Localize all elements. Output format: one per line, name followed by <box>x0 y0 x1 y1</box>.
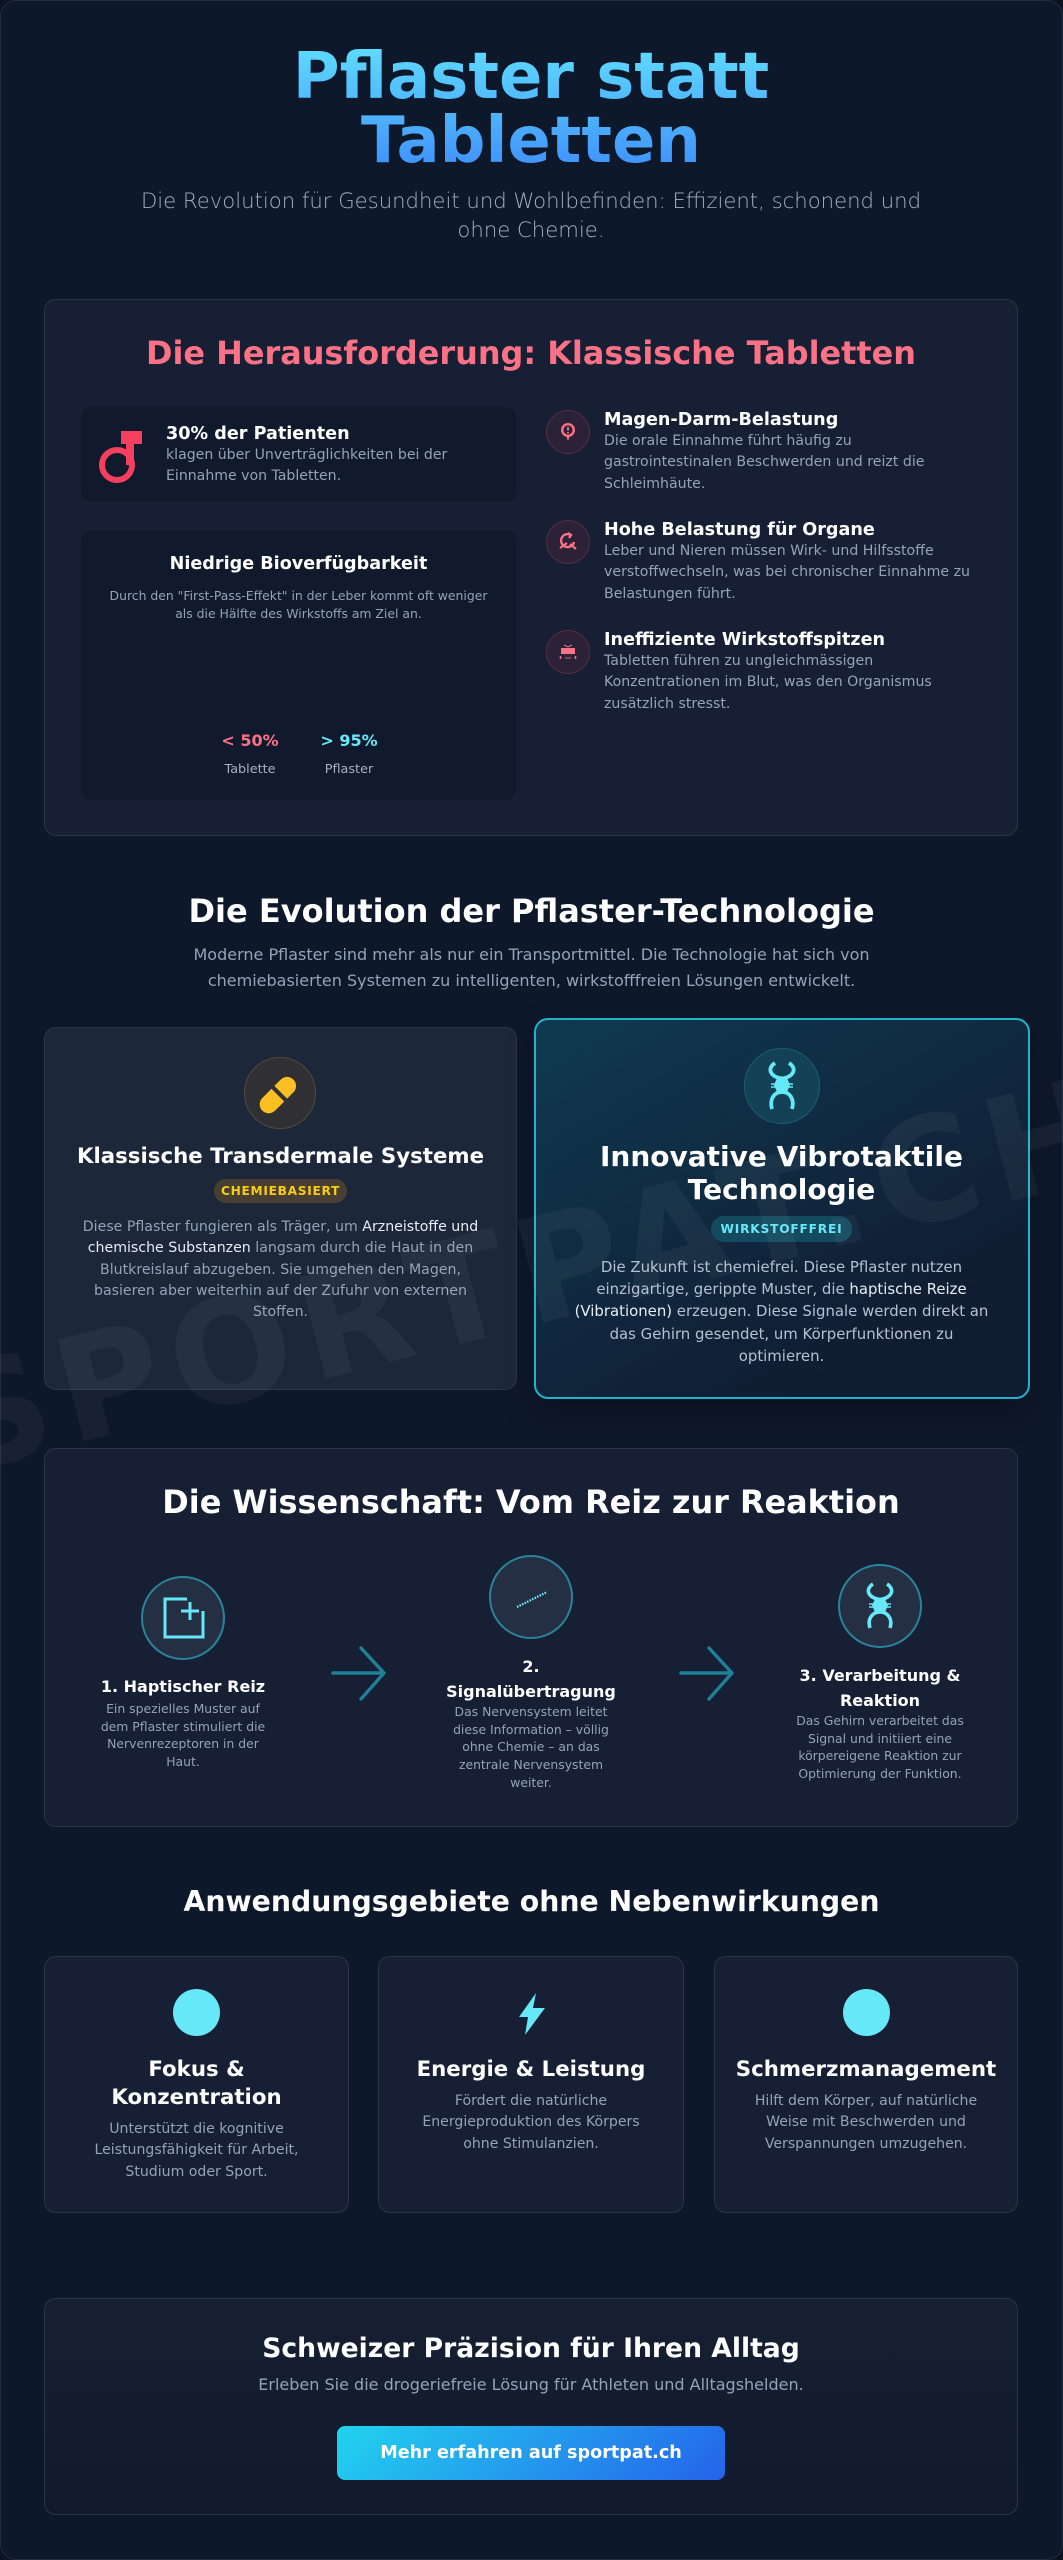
card title: Energie & Leistung <box>417 2057 645 2082</box>
card title: Technologie <box>688 1173 875 1206</box>
item description <box>604 433 924 492</box>
icon: organ strain <box>546 520 590 564</box>
step title <box>800 1666 960 1710</box>
evolution intro text <box>194 945 870 990</box>
evolution intro text: chemiebasierten Systemen zu intelligenten, wirkstofffreien Lösungen entwickelt. <box>208 971 855 990</box>
icon: pain circle <box>842 1989 890 2036</box>
panel: challenge of classic tablets <box>44 299 1018 836</box>
step description <box>101 1701 265 1769</box>
icon: warning pin <box>546 410 590 454</box>
card description <box>575 1258 988 1365</box>
step description: dem Pflaster stimuliert die <box>101 1719 265 1734</box>
bioavailability title: Niedrige Bioverfügbarkeit <box>170 554 427 574</box>
step description: diese Information – völlig <box>453 1722 609 1737</box>
label: tablet: Tablette <box>224 762 276 777</box>
step title: 1. Haptischer Reiz <box>101 1677 265 1696</box>
item description <box>604 653 932 712</box>
badge: agent-free: WIRKSTOFFFREI <box>721 1222 842 1236</box>
icon: vibrotactile <box>744 1048 820 1124</box>
card title <box>111 2057 282 2110</box>
heading: call to action: Schweizer Präzision für Ihren Alltag <box>262 2333 800 2364</box>
card: classic transdermal systems <box>44 1027 517 1390</box>
subtitle <box>141 188 921 242</box>
card description: chemische Substanzen langsam durch die Haut in den <box>88 1240 473 1256</box>
item description: Die orale Einnahme führt häufig zu <box>604 433 852 449</box>
subtitle: Die Revolution für Gesundheit und Wohlbefinden: Effizient, schonend und <box>141 188 921 213</box>
step description: zentrale Nervensystem <box>459 1757 603 1772</box>
card description <box>755 2093 977 2152</box>
card description: Studium oder Sport. <box>125 2164 268 2180</box>
heading: challenge: Die Herausforderung: Klassische Tabletten <box>146 334 916 372</box>
step description: Das Gehirn verarbeitet das <box>796 1713 964 1728</box>
step title <box>446 1657 616 1701</box>
card description: Blutkreislauf abzugeben. Sie umgehen den Magen, <box>100 1262 461 1278</box>
card: energy <box>378 1956 684 2213</box>
card description: Die Zukunft ist chemiefrei. Diese Pflaster nutzen <box>601 1258 962 1276</box>
icon: lightning bolt <box>519 1993 545 2035</box>
step description: ohne Chemie – an das <box>462 1739 600 1754</box>
card: focus <box>44 1956 349 2213</box>
title <box>131 45 931 173</box>
card description: Diese Pflaster fungieren als Träger, um Arzneistoffe und <box>83 1219 478 1235</box>
icon: pill <box>244 1057 316 1129</box>
title: Tabletten <box>361 104 701 178</box>
panel: call to action <box>44 2298 1018 2515</box>
item description: Tabletten führen zu ungleichmässigen <box>604 653 873 669</box>
card title: Innovative Vibrotaktile <box>600 1140 963 1173</box>
heading: evolution: Die Evolution der Pflaster-Technologie <box>188 892 875 930</box>
item title: Hohe Belastung für Organe <box>604 520 875 540</box>
bioavailability description: Durch den "First-Pass-Effekt" in der Leber kommt oft weniger <box>110 588 487 603</box>
evolution intro text: Moderne Pflaster sind mehr als nur ein Transportmittel. Die Technologie hat sich von <box>194 945 870 964</box>
icon: peaks <box>546 630 590 674</box>
step description: Haut. <box>166 1754 200 1769</box>
item: gastrointestinal burden <box>546 410 924 492</box>
icon: signal line <box>489 1555 573 1639</box>
item: inefficient peaks <box>546 630 932 712</box>
step description: Optimierung der Funktion. <box>798 1766 962 1781</box>
step 3 <box>796 1564 964 1781</box>
stat description: klagen über Unverträglichkeiten bei der <box>166 447 447 463</box>
button <box>337 2426 725 2480</box>
card title: Konzentration <box>111 2085 282 2110</box>
card description: ohne Stimulanzien. <box>463 2136 599 2152</box>
card description: Energieproduktion des Körpers <box>422 2114 640 2130</box>
item: organ strain <box>546 520 970 602</box>
step description <box>796 1713 964 1781</box>
card description: optimieren. <box>739 1347 824 1365</box>
card description: Stoffen. <box>253 1304 308 1320</box>
box: low bioavailability <box>81 530 516 800</box>
bioavailability description <box>110 588 488 621</box>
badge: agent-free <box>711 1216 852 1242</box>
badge: chemical based: CHEMIEBASIERT <box>221 1184 340 1198</box>
step 1 <box>101 1576 265 1769</box>
panel: science from stimulus to reaction <box>44 1448 1018 1827</box>
step title: Reaktion <box>840 1691 920 1710</box>
badge: chemical based <box>214 1179 347 1203</box>
arrow: step 1 to 2 <box>331 1646 386 1701</box>
bioavailability description: als die Hälfte des Wirkstoffs am Ziel an. <box>175 606 422 621</box>
subtitle: ohne Chemie. <box>457 217 605 242</box>
step 2 <box>446 1555 616 1790</box>
item description: Leber und Nieren müssen Wirk- und Hilfsstoffe <box>604 543 934 559</box>
heading: applications: Anwendungsgebiete ohne Nebenwirkungen <box>183 1885 880 1918</box>
item description <box>604 543 970 602</box>
icon: vibrotactile reaction <box>838 1564 922 1648</box>
card description: basieren aber weiterhin auf der Zufuhr von externen <box>94 1283 467 1299</box>
step title: 2. <box>522 1657 540 1676</box>
step description: weiter. <box>510 1775 552 1790</box>
card description: einzigartige, gerippte Muster, die haptische Reize <box>596 1280 967 1298</box>
card title: Schmerzmanagement <box>736 2057 996 2082</box>
card title: Klassische Transdermale Systeme <box>77 1144 484 1169</box>
step title: Signalübertragung <box>446 1682 616 1701</box>
card description: Fördert die natürliche <box>455 2093 607 2109</box>
stat description <box>166 447 448 484</box>
stat title: 30% der Patienten <box>166 424 350 444</box>
step description: Signal und initiiert eine <box>808 1731 952 1746</box>
icon: patch document <box>141 1576 225 1660</box>
step description: Das Nervensystem leitet <box>455 1704 607 1719</box>
item description: Schleimhäute. <box>604 476 705 492</box>
value: tablet: < 50% <box>221 731 279 750</box>
step description <box>453 1704 609 1790</box>
icon: red ring with flag <box>99 431 142 483</box>
card description: Verspannungen umzugehen. <box>765 2136 967 2152</box>
icon: focus circle <box>173 1989 220 2036</box>
step description: Ein spezielles Muster auf <box>106 1701 260 1716</box>
card description: (Vibrationen) erzeugen. Diese Signale werden direkt an <box>575 1302 988 1320</box>
item description: gastrointestinalen Beschwerden und reizt die <box>604 454 924 470</box>
item title: Ineffiziente Wirkstoffspitzen <box>604 630 885 650</box>
stat box: 30 percent <box>81 407 516 502</box>
card description <box>94 2121 298 2180</box>
heading: science: Die Wissenschaft: Vom Reiz zur Reaktion <box>162 1483 900 1521</box>
item title: Magen-Darm-Belastung <box>604 410 838 430</box>
card title: Fokus & <box>148 2057 245 2082</box>
card description: Hilft dem Körper, auf natürliche <box>755 2093 977 2109</box>
value: patch: > 95% <box>320 731 378 750</box>
item description: verstoffwechseln, was bei chronischer Einnahme zu <box>604 564 970 580</box>
step description: Nervenrezeptoren in der <box>107 1736 259 1751</box>
item description: Konzentrationen im Blut, was den Organismus <box>604 674 932 690</box>
item description: zusätzlich stresst. <box>604 696 730 712</box>
item description: Belastungen führt. <box>604 586 736 602</box>
step description: körpereigene Reaktion zur <box>798 1748 962 1763</box>
label: patch: Pflaster <box>325 762 373 777</box>
card description <box>422 2093 640 2152</box>
card description <box>83 1219 478 1320</box>
card description: Weise mit Beschwerden und <box>766 2114 966 2130</box>
title: Pflaster statt <box>293 40 769 114</box>
card: innovative vibrotactile technology <box>534 1018 1030 1399</box>
card description: Unterstützt die kognitive <box>109 2121 284 2137</box>
card: pain management <box>714 1956 1018 2213</box>
arrow: step 2 to 3 <box>679 1646 734 1701</box>
card description: das Gehirn gesendet, um Körperfunktionen zu <box>610 1325 953 1343</box>
button: Mehr erfahren auf sportpat.ch <box>380 2443 682 2463</box>
call to action text: Erleben Sie die drogeriefreie Lösung für Athleten und Alltagshelden. <box>258 2375 804 2394</box>
step title: 3. Verarbeitung & <box>800 1666 960 1685</box>
card title <box>600 1140 963 1206</box>
card description: Leistungsfähigkeit für Arbeit, <box>94 2142 298 2158</box>
stat description: Einnahme von Tabletten. <box>166 468 341 484</box>
